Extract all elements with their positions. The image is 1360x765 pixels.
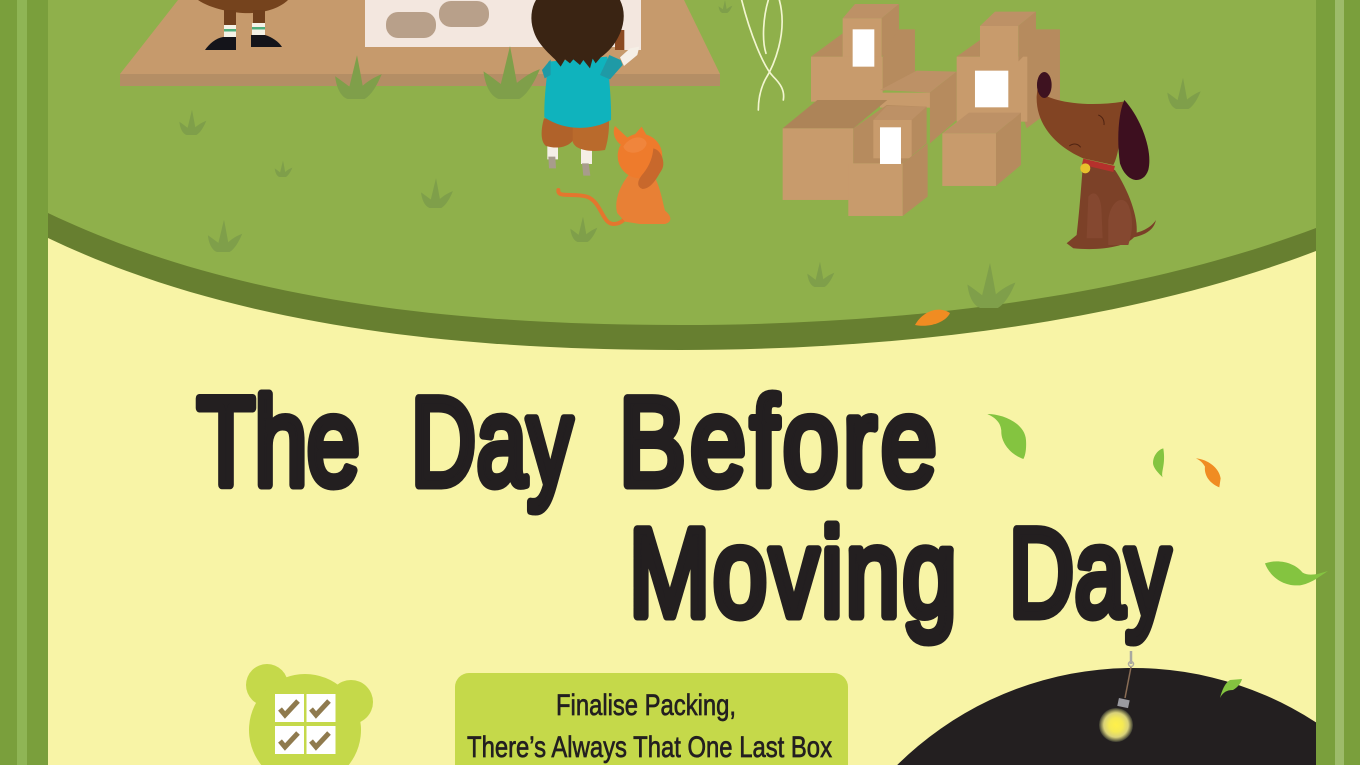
title: Moving <box>629 503 957 643</box>
falling leaves <box>987 414 1328 585</box>
grass tufts <box>179 0 1201 308</box>
orange cat <box>558 126 670 224</box>
icon: checklist on green bear badge <box>246 664 373 765</box>
white string <box>742 0 784 110</box>
title <box>197 372 1171 644</box>
title: Before <box>619 372 937 512</box>
title: Day <box>1009 504 1171 644</box>
step label panel: There’s Always That One Last Box <box>467 731 832 764</box>
lawn with curved edge <box>48 0 1316 350</box>
left green border <box>0 0 48 765</box>
leaf on hill <box>1220 679 1242 698</box>
stack of cardboard boxes <box>783 4 1060 216</box>
step label panel <box>455 673 848 765</box>
picnic mat <box>120 0 720 86</box>
hanging light bulb <box>1099 651 1134 742</box>
brown dog <box>1037 72 1156 249</box>
step label panel: Finalise Packing, <box>556 689 736 722</box>
title: Day <box>411 373 573 513</box>
orange leaf on lawn edge <box>915 310 950 326</box>
dark hill <box>897 668 1316 765</box>
person standing on the mat <box>198 0 288 50</box>
right green border <box>1316 0 1360 765</box>
leaf tip over right border <box>1316 571 1328 579</box>
boy seen from behind <box>531 0 641 176</box>
poster on the mat <box>365 0 641 47</box>
title: The <box>197 372 360 512</box>
